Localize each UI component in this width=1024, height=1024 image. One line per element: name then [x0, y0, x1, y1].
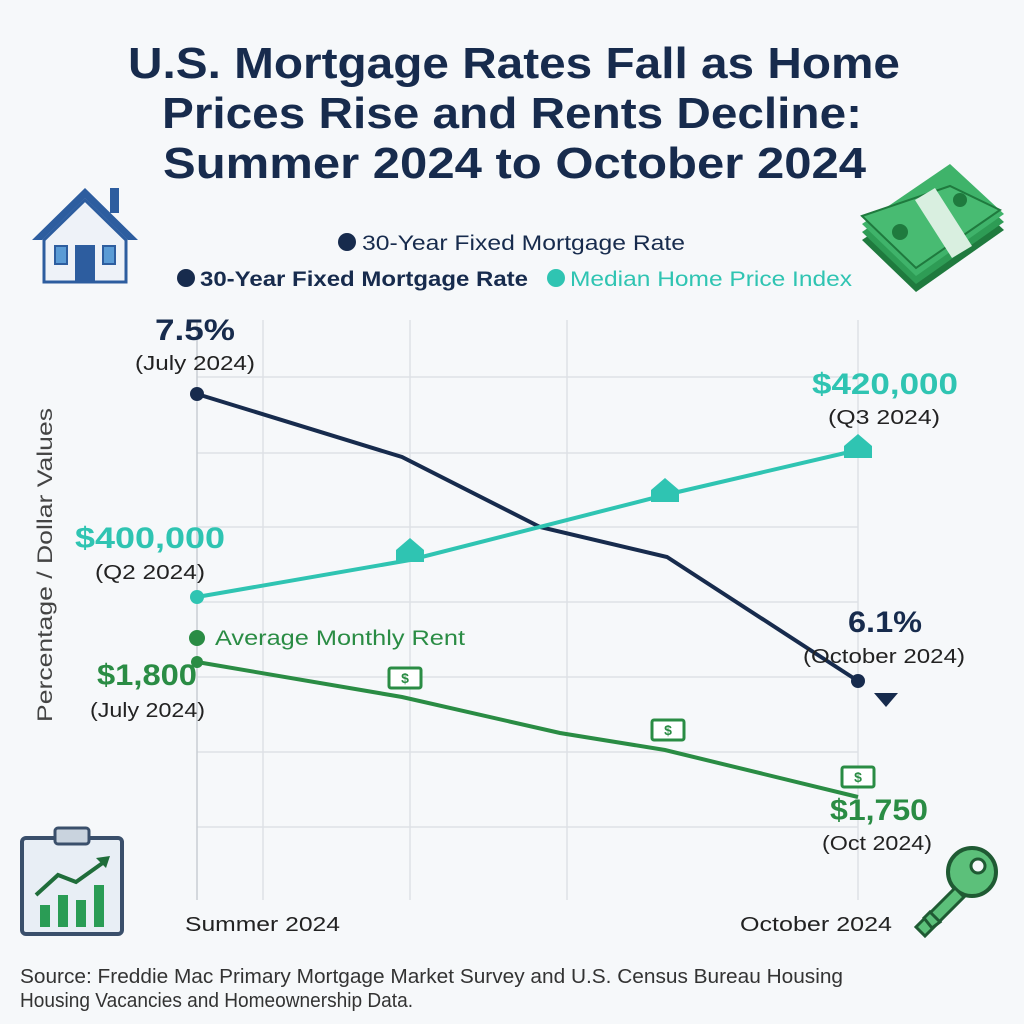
icon: key [916, 848, 996, 936]
data labels [75, 314, 965, 855]
data labels: 6.1% [848, 606, 922, 639]
legend: 30-Year Fixed Mortgage Rate [362, 232, 685, 255]
data labels: (Q3 2024) [828, 407, 940, 429]
legend [177, 232, 853, 291]
x-axis labels: October 2024 [740, 914, 892, 936]
legend: 30-Year Fixed Mortgage Rate [200, 268, 528, 291]
data labels: $400,000 [75, 522, 225, 555]
source note [20, 966, 843, 1012]
data labels: (Oct 2024) [822, 833, 932, 855]
line: rent: $ [401, 670, 409, 686]
x-axis labels: Summer 2024 [185, 914, 340, 936]
data labels: $1,750 [830, 794, 928, 827]
chart grid [197, 320, 858, 900]
icon: money stack [862, 164, 1004, 292]
icon: house [32, 188, 138, 282]
line: rent [191, 656, 874, 797]
legend: Median Home Price Index [570, 268, 853, 291]
title [128, 39, 900, 188]
title: Prices Rise and Rents Decline: [162, 89, 862, 138]
line: rent: $ [854, 769, 862, 785]
y-axis label: Percentage / Dollar Values [34, 408, 57, 722]
rent legend: Average Monthly Rent [215, 627, 465, 650]
x-axis labels [185, 914, 892, 936]
data labels: (July 2024) [90, 700, 205, 722]
source note: Source: Freddie Mac Primary Mortgage Market Survey and U.S. Census Bureau Housing [20, 966, 843, 988]
icon: clipboard chart [22, 828, 122, 934]
data labels: (October 2024) [803, 646, 965, 668]
data labels: 7.5% [155, 314, 235, 347]
data labels: $420,000 [812, 368, 958, 401]
line: home price [190, 434, 872, 604]
title: U.S. Mortgage Rates Fall as Home [128, 39, 900, 88]
data labels: (Q2 2024) [95, 562, 205, 584]
source note: Housing Vacancies and Homeownership Data. [20, 990, 413, 1012]
line: rent: $ [664, 722, 672, 738]
data labels: $1,800 [97, 659, 197, 692]
line: mortgage rate [190, 387, 898, 707]
data labels: (July 2024) [135, 353, 255, 375]
title: Summer 2024 to October 2024 [163, 139, 867, 188]
